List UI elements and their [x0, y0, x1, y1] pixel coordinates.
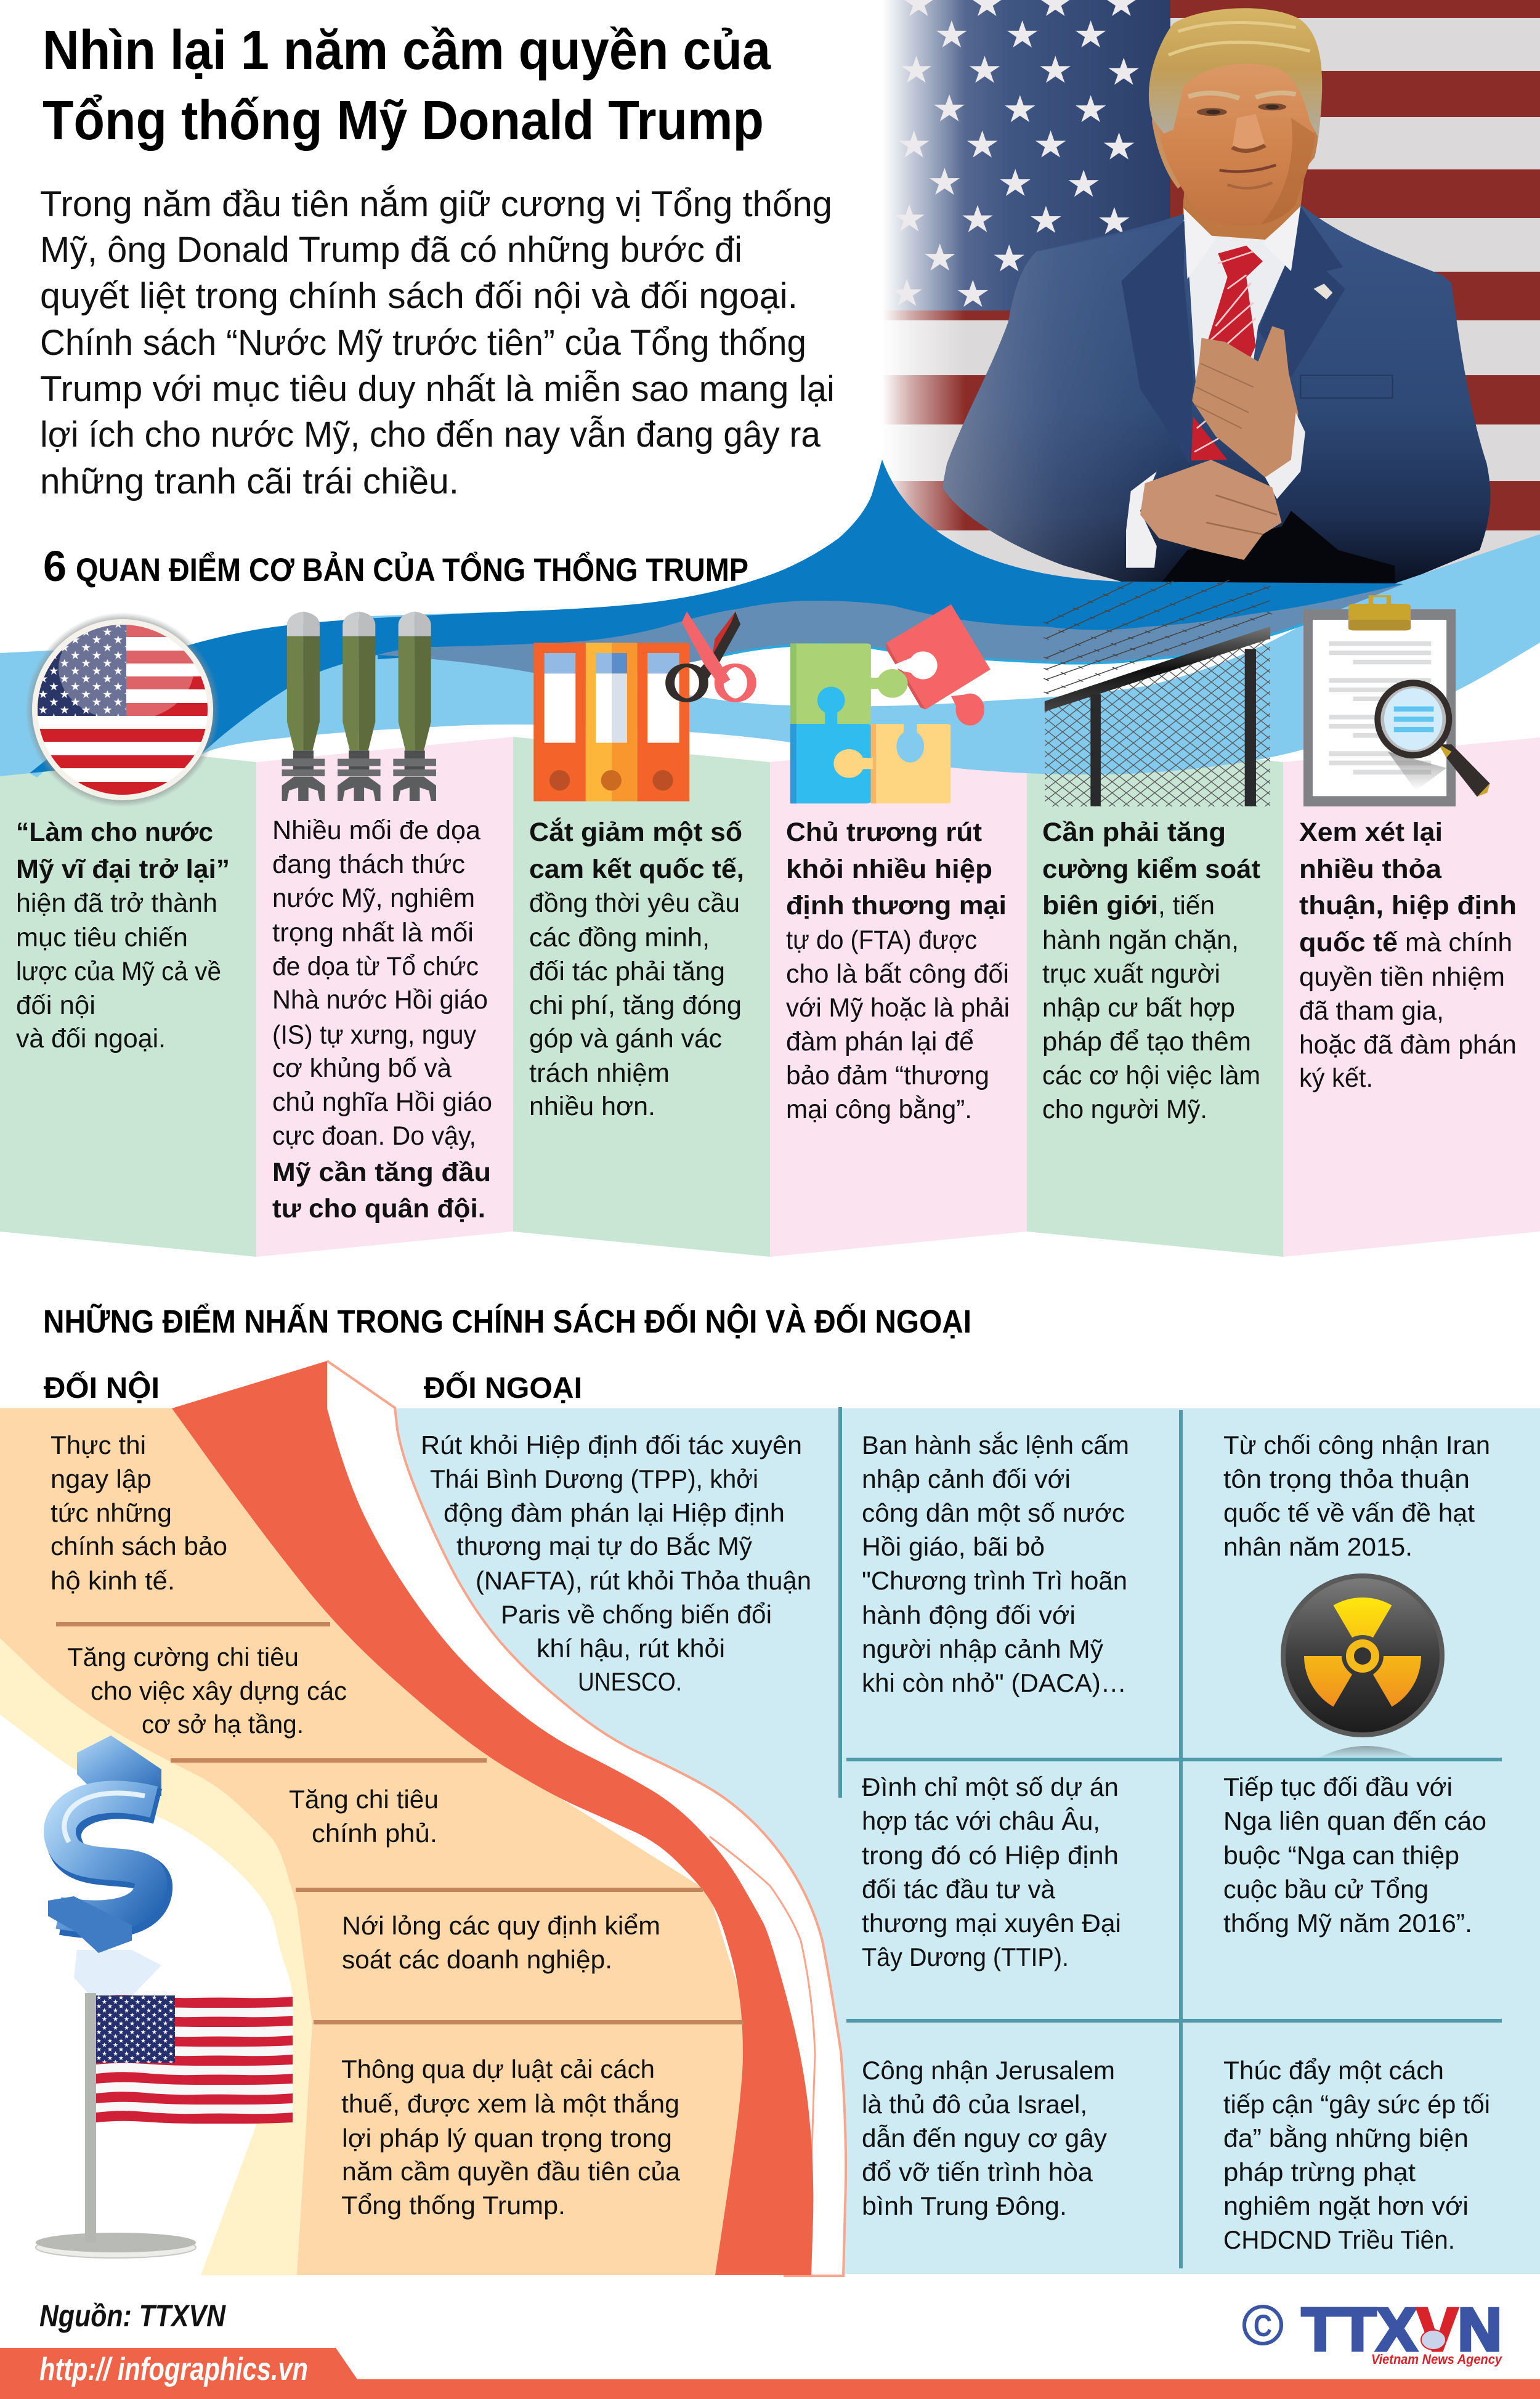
- panel 6 text: quyền tiền nhiệm: [1299, 962, 1505, 992]
- panel 6 text: mà chính: [1405, 928, 1512, 957]
- panel 2 text: trọng nhất là mối: [272, 918, 474, 948]
- foreign item: Iran: Từ chối công nhận Iran: [1223, 1431, 1490, 1459]
- panel 4 text: cho là bất công đối: [786, 959, 1009, 989]
- foreign item: travel ban: công dân một số nước: [862, 1498, 1125, 1527]
- panel 3 text: đồng thời yêu cầu: [529, 888, 740, 918]
- panel 4 text: khỏi nhiều hiệp: [786, 854, 992, 884]
- foreign item: Iran: quốc tế về vấn đề hạt: [1223, 1498, 1475, 1527]
- foreign item: travel ban: hành động đối với: [862, 1601, 1076, 1630]
- foreign item: Jerusalem: Công nhận Jerusalem: [862, 2056, 1115, 2085]
- panel 5 text: [1042, 818, 1260, 1124]
- foreign item: Jerusalem: dẫn đến nguy cơ gây: [862, 2124, 1107, 2153]
- wave band: layered blue ribbons: [0, 460, 1540, 777]
- footer bar with website: [0, 2348, 1540, 2399]
- domestic item 4: [342, 1911, 660, 1974]
- dividers: [56, 1622, 744, 2024]
- panel 3 text: góp và gánh vác: [529, 1024, 722, 1053]
- foreign item: North Korea: pháp trừng phạt: [1223, 2157, 1416, 2186]
- panel 4 text: đàm phán lại để: [786, 1027, 974, 1057]
- foreign item: withdrawals: Rút khỏi Hiệp định đối tác xuyên: [421, 1431, 802, 1459]
- foreign policy panel background: [370, 1408, 1540, 2274]
- panel 2 text: đang thách thức: [272, 850, 465, 879]
- foreign item: Russia: cuộc bầu cử Tổng: [1223, 1875, 1429, 1904]
- foreign item: North Korea: [1223, 2056, 1490, 2254]
- panel 2 text: tư cho quân đội.: [272, 1194, 485, 1224]
- panel 1 text: [16, 818, 230, 1053]
- domestic item 1: tức những: [51, 1498, 172, 1527]
- foreign item: Russia: [1223, 1772, 1486, 1938]
- domestic item 3: chính phủ.: [312, 1819, 437, 1848]
- heading: domestic: ĐỐI NỘI: [44, 1371, 160, 1405]
- panel 3 text: cam kết quốc tế,: [529, 854, 744, 884]
- panel 6 text: [1299, 818, 1517, 1093]
- panel 6 text: thuận, hiệp định: [1299, 891, 1517, 920]
- domestic item 2: cơ sở hạ tầng.: [142, 1710, 304, 1739]
- foreign item: Jerusalem: đổ vỡ tiến trình hòa: [862, 2157, 1093, 2186]
- foreign item: TTIP: Tây Dương (TTIP).: [862, 1942, 1069, 1971]
- heading: 6 viewpoints: 6: [43, 542, 67, 590]
- panel 6 text: quốc tế: [1299, 928, 1398, 957]
- intro paragraph: Trump với mục tiêu duy nhất là miễn sao mang lại: [40, 369, 835, 409]
- foreign item: TTIP: Đình chỉ một số dự án: [862, 1772, 1119, 1801]
- icon: clipboard and magnifier: [1303, 596, 1490, 806]
- intro paragraph: quyết liệt trong chính sách đối nội và đối ngoại.: [40, 276, 798, 316]
- intro paragraph: Mỹ, ông Donald Trump đã có những bước đi: [40, 230, 742, 270]
- foreign item: Iran: [1223, 1431, 1490, 1561]
- foreign item: travel ban: khi còn nhỏ" (DACA)…: [862, 1668, 1127, 1697]
- panel 5 text: các cơ hội việc làm: [1042, 1061, 1260, 1090]
- domestic item 5: thuế, được xem là một thắng: [341, 2089, 679, 2118]
- panel 2 text: (IS) tự xưng, nguy: [272, 1020, 476, 1050]
- panel 1 text: Mỹ vĩ đại trở lại”: [16, 854, 230, 884]
- foreign item: withdrawals: khí hậu, rút khỏi: [537, 1634, 725, 1663]
- heading: foreign: ĐỐI NGOẠI: [424, 1371, 582, 1405]
- foreign item: TTIP: [862, 1772, 1121, 1971]
- panel 6 text: nhiều thỏa: [1299, 854, 1442, 884]
- intro paragraph: lợi ích cho nước Mỹ, cho đến nay vẫn đang gây ra: [40, 415, 821, 455]
- foreign item: Iran: tôn trọng thỏa thuận: [1223, 1464, 1470, 1493]
- panel 5 text: cường kiểm soát: [1042, 854, 1260, 884]
- panel 5 text: pháp để tạo thêm: [1042, 1027, 1251, 1057]
- foreign item: withdrawals: Thái Bình Dương (TPP), khởi: [430, 1464, 758, 1493]
- panel 5 text: nhập cư bất hợp: [1042, 993, 1235, 1023]
- panel 3 text: trách nhiệm: [529, 1058, 670, 1088]
- panel 4 text: [786, 818, 1010, 1124]
- foreign item: Jerusalem: là thủ đô của Israel,: [862, 2090, 1087, 2119]
- icon: binders and scissors: [533, 612, 752, 802]
- white ribbon with salmon outline: [308, 1361, 846, 2276]
- panel 4 text: định thương mại: [786, 891, 1007, 920]
- panel 2 text: nước Mỹ, nghiêm: [272, 883, 475, 913]
- foreign item: travel ban: người nhập cảnh Mỹ: [862, 1634, 1103, 1663]
- panel 5 text: trục xuất người: [1042, 959, 1220, 989]
- heading: policy highlights: NHỮNG ĐIỂM NHẤN TRONG CHÍNH SÁCH ĐỐI NỘI VÀ ĐỐI NGOẠI: [43, 1302, 971, 1340]
- intro paragraph: những tranh cãi trái chiều.: [40, 461, 459, 501]
- domestic item 4: Nới lỏng các quy định kiểm: [342, 1911, 660, 1940]
- footer bar with website: http:// infographics.vn: [39, 2352, 308, 2387]
- foreign item: North Korea: Thúc đẩy một cách: [1223, 2056, 1444, 2085]
- domestic item 5: Thông qua dự luật cải cách: [341, 2055, 655, 2084]
- panel 3 text: [529, 817, 744, 1121]
- intro paragraph: [40, 184, 835, 501]
- domestic item 2: [67, 1642, 347, 1739]
- panel backgrounds: six viewpoints: [0, 737, 1540, 1257]
- domestic item 3: [289, 1785, 439, 1848]
- foreign item: Russia: thống Mỹ năm 2016”.: [1223, 1909, 1472, 1938]
- foreign item: Iran: nhân năm 2015.: [1223, 1532, 1412, 1561]
- panel 6 text: đã tham gia,: [1299, 996, 1444, 1026]
- domestic item 2: cho việc xây dựng các: [91, 1676, 347, 1705]
- panel 1 text: đối nội: [16, 991, 95, 1020]
- foreign item: TTIP: hợp tác với châu Âu,: [862, 1806, 1100, 1835]
- domestic item 1: ngay lập: [51, 1464, 152, 1493]
- panel 2 text: Nhiều mối đe dọa: [272, 816, 480, 845]
- panel 4 text: tự do (FTA) được: [786, 925, 977, 955]
- panel 4 text: bảo đảm “thương: [786, 1061, 989, 1090]
- logo: TTXVN Vietnam News Agency: C: [1254, 2308, 1272, 2343]
- panel 5 text: , tiến: [1158, 891, 1215, 920]
- panel 6 text: Xem xét lại: [1299, 818, 1443, 847]
- panel 2 text: cực đoan. Do vậy,: [272, 1121, 476, 1151]
- domestic item 1: Thực thi: [51, 1431, 146, 1459]
- foreign item: travel ban: Hồi giáo, bãi bỏ: [862, 1532, 1045, 1561]
- foreign item: North Korea: nghiêm ngặt hơn với: [1223, 2191, 1469, 2220]
- foreign item: withdrawals: thương mại tự do Bắc Mỹ: [456, 1532, 752, 1561]
- panel 5 text: hành ngăn chặn,: [1042, 925, 1239, 955]
- foreign item: Russia: buộc “Nga can thiệp: [1223, 1841, 1459, 1870]
- logo: TTXVN Vietnam News Agency: TTXVN: [1302, 2295, 1502, 2363]
- panel 3 text: nhiều hơn.: [529, 1092, 655, 1121]
- foreign item: Russia: Nga liên quan đến cáo: [1223, 1806, 1486, 1835]
- logo: TTXVN Vietnam News Agency: Vietnam News Agency: [1371, 2352, 1503, 2367]
- domestic item 5: [341, 2055, 681, 2220]
- icon: three missiles: [282, 612, 436, 801]
- domestic item 3: Tăng chi tiêu: [289, 1785, 439, 1814]
- domestic item 1: hộ kinh tế.: [51, 1566, 175, 1595]
- panel 6 text: hoặc đã đàm phán: [1299, 1030, 1517, 1060]
- foreign item: TTIP: trong đó có Hiệp định: [862, 1841, 1119, 1870]
- icon: border fence with barbed wire: [1045, 580, 1270, 806]
- panel 2 text: chủ nghĩa Hồi giáo: [272, 1087, 492, 1117]
- heading: 6 viewpoints: QUAN ĐIỂM CƠ BẢN CỦA TỔNG THỔNG TRUMP: [76, 551, 748, 588]
- hero photo: Donald Trump in front of US flag: [882, 0, 1540, 585]
- panel 1 text: hiện đã trở thành: [16, 888, 217, 918]
- panel 3 text: các đồng minh,: [529, 923, 710, 952]
- foreign item: withdrawals: động đàm phán lại Hiệp định: [444, 1498, 785, 1527]
- panel 2 text: đe dọa từ Tổ chức: [272, 952, 479, 981]
- domestic policy band: [0, 1361, 813, 2275]
- foreign item: Jerusalem: [862, 2056, 1115, 2220]
- source: Nguồn: TTXVN: [39, 2299, 226, 2333]
- title: Nhìn lại 1 năm cầm quyền của: [43, 20, 771, 81]
- foreign item: North Korea: đa” bằng những biện: [1223, 2124, 1469, 2153]
- foreign item: travel ban: "Chương trình Trì hoãn: [862, 1566, 1127, 1595]
- foreign item: TTIP: đối tác đầu tư và: [862, 1875, 1056, 1904]
- foreign item: withdrawals: [421, 1431, 811, 1696]
- foreign item: withdrawals: (NAFTA), rút khỏi Thỏa thuận: [476, 1566, 811, 1595]
- icon: US flag on pole: [36, 1993, 293, 2258]
- panel 5 text: biên giới: [1042, 891, 1158, 920]
- foreign item: North Korea: CHDCND Triều Tiên.: [1223, 2225, 1455, 2254]
- foreign item: North Korea: tiếp cận “gây sức ép tối: [1223, 2090, 1490, 2119]
- panel 4 text: Chủ trương rút: [786, 818, 982, 847]
- domestic item 1: chính sách bảo: [51, 1532, 227, 1561]
- domestic item 2: Tăng cường chi tiêu: [67, 1642, 299, 1671]
- icon: US flag badge: [25, 612, 220, 807]
- intro paragraph: Trong năm đầu tiên nắm giữ cương vị Tổng thống: [40, 184, 832, 224]
- panel 6 text: ký kết.: [1299, 1063, 1373, 1093]
- domestic item 1: [51, 1431, 227, 1595]
- foreign item: travel ban: [862, 1431, 1129, 1697]
- panel 2 text: Nhà nước Hồi giáo: [272, 985, 488, 1015]
- panel 3 text: đối tác phải tăng: [529, 957, 725, 986]
- heading: 6 viewpoints: [43, 542, 748, 590]
- domestic item 4: soát các doanh nghiệp.: [342, 1945, 612, 1974]
- panel 5 text: Cần phải tăng: [1042, 818, 1226, 847]
- panel 2 text: [272, 816, 492, 1224]
- foreign item: travel ban: Ban hành sắc lệnh cấm: [862, 1431, 1129, 1459]
- title: Tổng thống Mỹ Donald Trump: [43, 90, 764, 152]
- foreign item: Jerusalem: bình Trung Đông.: [862, 2191, 1067, 2220]
- panel 4 text: mại công bằng”.: [786, 1095, 972, 1124]
- panel 1 text: mục tiêu chiến: [16, 923, 188, 952]
- icon: puzzle pieces: [790, 604, 991, 803]
- panel 5 text: cho người Mỹ.: [1042, 1095, 1207, 1124]
- panel 2 text: cơ khủng bố và: [272, 1053, 452, 1083]
- panel 1 text: “Làm cho nước: [16, 818, 213, 847]
- foreign item: withdrawals: UNESCO.: [578, 1667, 682, 1696]
- domestic item 5: lợi pháp lý quan trọng trong: [342, 2124, 672, 2153]
- panel 3 text: Cắt giảm một số: [529, 817, 742, 847]
- panel 2 text: Mỹ cần tăng đầu: [272, 1158, 491, 1187]
- panel 1 text: và đối ngoại.: [16, 1024, 166, 1053]
- icon: radiation symbol: [1281, 1573, 1445, 1758]
- panel 3 text: chi phí, tăng đóng: [529, 991, 742, 1020]
- intro paragraph: Chính sách “Nước Mỹ trước tiên” của Tổng thống: [40, 323, 806, 363]
- foreign item: travel ban: nhập cảnh đối với: [862, 1464, 1071, 1493]
- domestic item 5: năm cầm quyền đầu tiên của: [342, 2157, 681, 2186]
- title: [43, 20, 771, 152]
- foreign item: Russia: Tiếp tục đối đầu với: [1223, 1772, 1453, 1801]
- panel 4 text: với Mỹ hoặc là phải: [786, 993, 1010, 1023]
- icon: blue dollar sign: [48, 1735, 161, 2008]
- domestic item 5: Tổng thống Trump.: [341, 2191, 565, 2220]
- foreign item: TTIP: thương mại xuyên Đại: [862, 1909, 1121, 1938]
- panel 1 text: lược của Mỹ cả về: [16, 957, 221, 986]
- foreign item: withdrawals: Paris về chống biến đổi: [501, 1600, 772, 1629]
